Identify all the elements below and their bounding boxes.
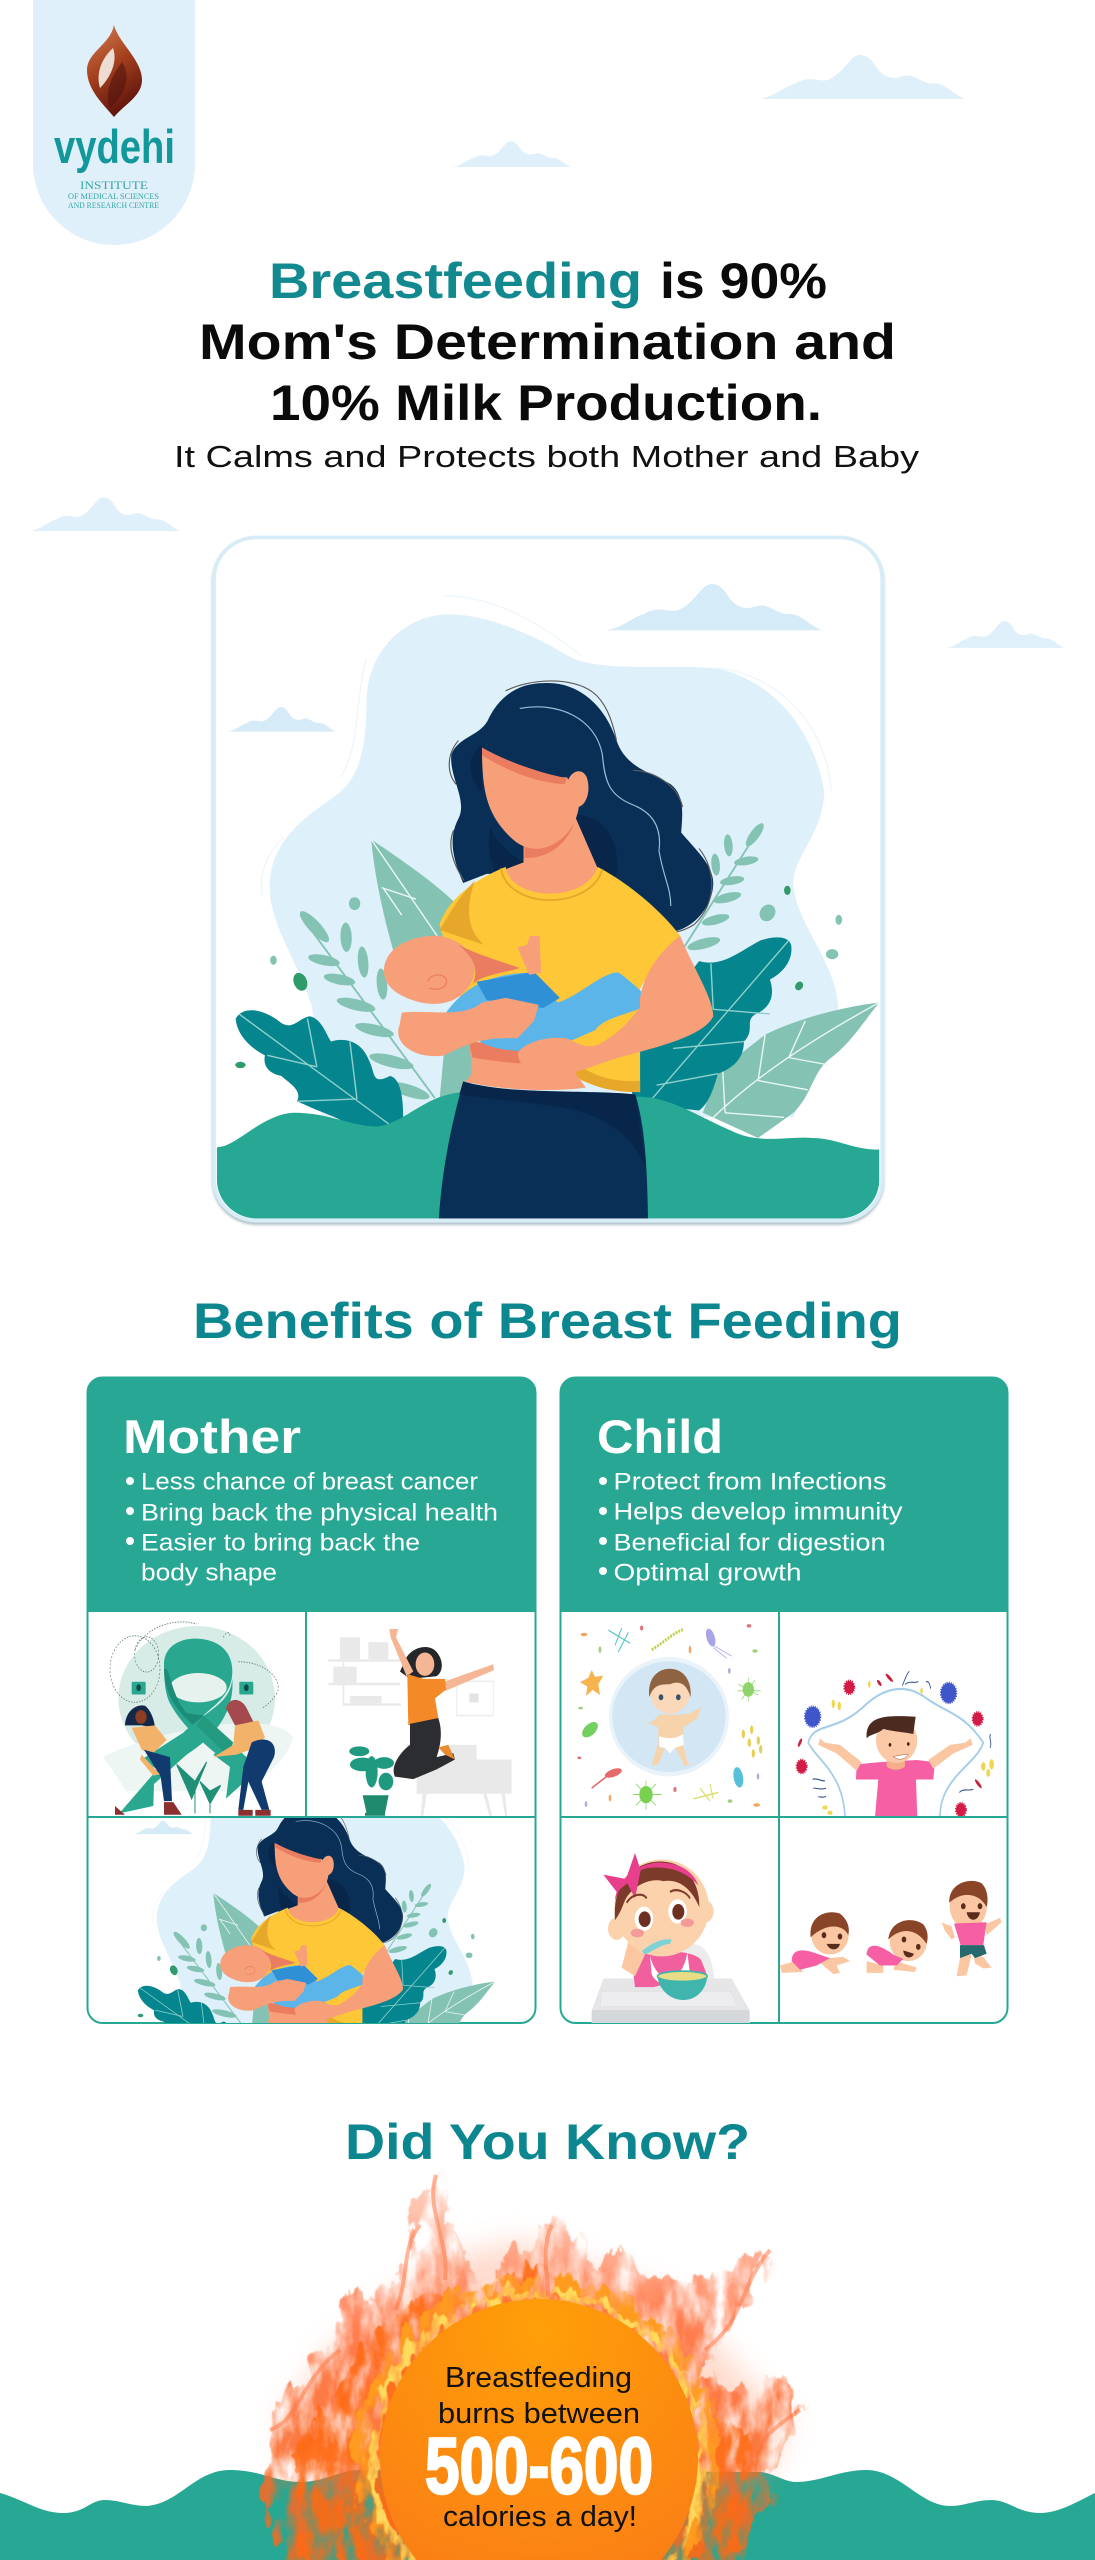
icon: illustration clouds <box>227 584 822 732</box>
illustration: mother breastfeeding <box>217 584 879 1223</box>
dark leaf right <box>628 937 791 1110</box>
panel: mother and baby illustration <box>214 537 882 1223</box>
icon: logo flame <box>87 25 142 117</box>
heading: child: Child <box>597 1410 723 1463</box>
pants <box>439 1082 648 1223</box>
neck <box>506 814 598 894</box>
germs <box>577 1624 762 1810</box>
logo badge <box>33 0 195 245</box>
cell: boy with immunity shield <box>797 1671 994 1817</box>
dots <box>235 886 842 1068</box>
heading: mother: Mother <box>123 1410 301 1463</box>
tall light leaf <box>371 839 475 1100</box>
callout text <box>438 2362 640 2533</box>
child bullet list: Optimal growth <box>614 1560 802 1586</box>
callout text: burns between <box>438 2398 640 2430</box>
heading: did you know: Did You Know? <box>345 2114 750 2170</box>
cell: baby growth stages <box>780 1881 1002 1976</box>
cell: baby girl eating <box>592 1853 750 2024</box>
woman left <box>125 1705 155 1728</box>
title: Breastfeeding <box>269 253 642 309</box>
logo wordmark: vydehi <box>54 120 175 173</box>
child header <box>560 1377 1008 1612</box>
callout text: Breastfeeding <box>445 2362 632 2394</box>
icon: cloud left <box>29 497 180 531</box>
frame <box>214 537 882 1221</box>
woman right <box>226 1700 254 1725</box>
illustration: flames <box>265 2175 800 2560</box>
mother bullet list: body shape <box>141 1560 277 1586</box>
cell: mother and baby thumbnail <box>127 1754 495 2102</box>
cell: happy jumping woman <box>328 1629 512 1816</box>
logo subtitle <box>68 178 159 210</box>
mother arms and hands <box>398 936 713 1075</box>
hair <box>449 681 713 932</box>
mother bullet list <box>126 1468 498 1586</box>
face <box>482 747 588 849</box>
mother bullet list: Easier to bring back the <box>141 1530 420 1556</box>
big light leaf right <box>703 1002 879 1138</box>
child bullet list: Helps develop immunity <box>614 1498 902 1526</box>
callout text: calories a day! <box>443 2501 637 2533</box>
logo subtitle: OF MEDICAL SCIENCES <box>68 192 159 201</box>
callout: calories circle <box>380 2299 698 2560</box>
icon: cloud right <box>946 621 1064 648</box>
cell: breast cancer ribbon <box>103 1622 293 1816</box>
title <box>199 253 896 431</box>
heading: benefits: Benefits of Breast Feeding <box>193 1293 902 1349</box>
dark leaf left <box>236 1010 403 1131</box>
right sprig <box>683 821 767 953</box>
logo subtitle: AND RESEARCH CENTRE <box>68 201 159 210</box>
cell: baby protected from germs <box>577 1624 762 1810</box>
viruses <box>797 1681 983 1816</box>
mother bullet list: Bring back the physical health <box>141 1500 498 1526</box>
grid lines mother <box>87 1612 536 1817</box>
logo subtitle: INSTITUTE <box>80 178 148 192</box>
callout number: 500-600 <box>425 2421 653 2510</box>
jumping woman <box>400 1647 442 1679</box>
panel: mother benefits <box>86 1376 536 2024</box>
mother header <box>87 1377 536 1612</box>
plant pot <box>363 1795 389 1813</box>
title: 10% Milk Production. <box>270 375 822 431</box>
shirt <box>440 867 680 1092</box>
title: Mom's Determination and <box>199 314 896 370</box>
icon: cloud top middle <box>452 141 571 167</box>
left sprig <box>296 908 435 1103</box>
grid lines child <box>560 1612 1008 2023</box>
child bullet list <box>599 1468 902 1586</box>
plant <box>177 1762 221 1813</box>
child bullet list: Protect from Infections <box>614 1468 886 1496</box>
mother bullet list: Less chance of breast cancer <box>141 1468 478 1496</box>
child bullet list: Beneficial for digestion <box>614 1530 886 1556</box>
icon: cloud top right <box>758 55 965 99</box>
bottom wave <box>0 2470 1095 2560</box>
panel: child benefits <box>560 1377 1008 2024</box>
title: is 90% <box>660 253 827 309</box>
baby <box>384 936 651 1051</box>
subtitle: It Calms and Protects both Mother and Baby <box>174 439 920 474</box>
ground hill <box>217 1092 879 1223</box>
belly <box>465 1044 586 1090</box>
